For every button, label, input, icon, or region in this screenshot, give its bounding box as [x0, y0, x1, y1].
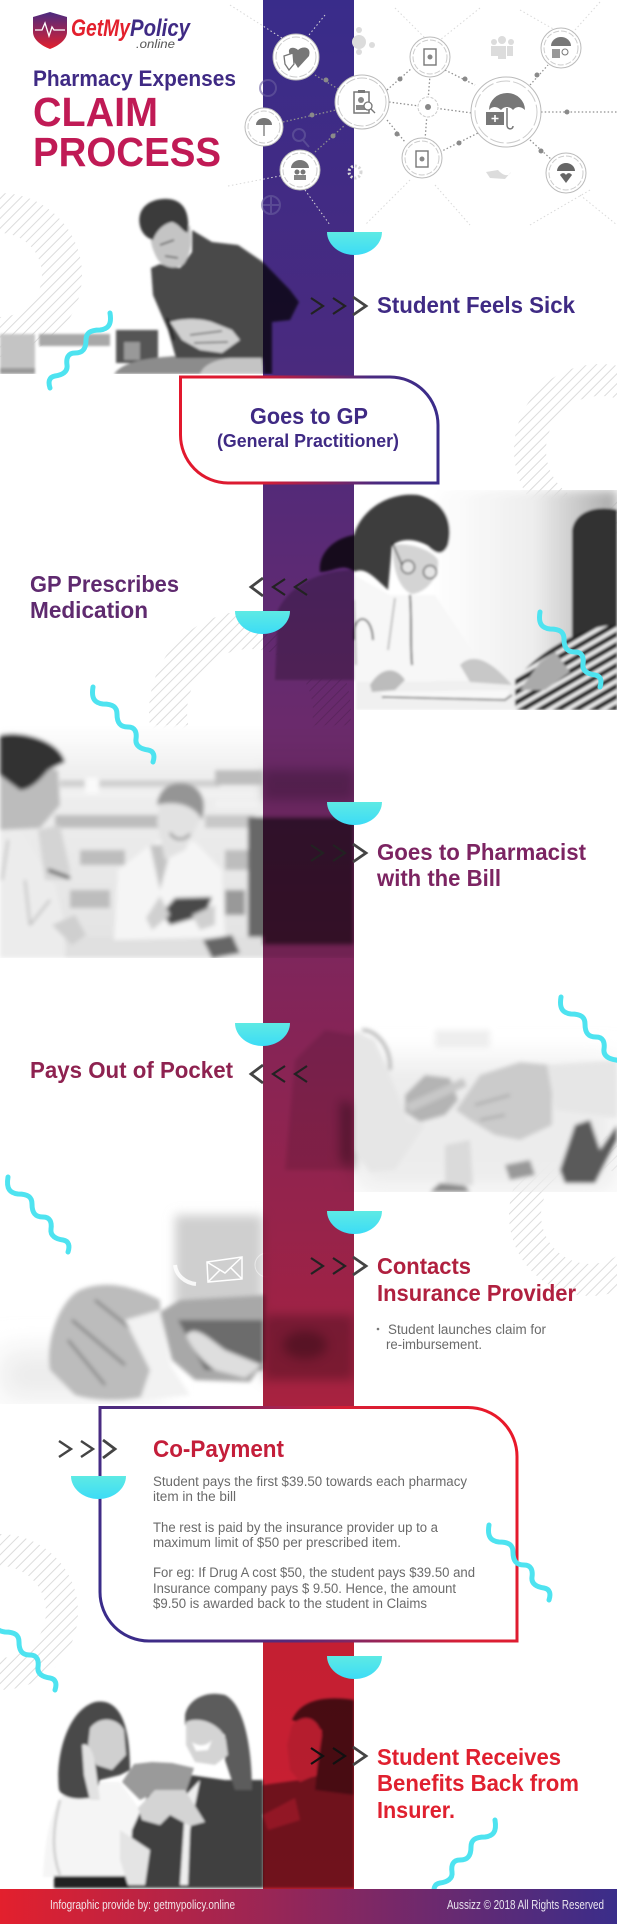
node: heart shield — [273, 34, 319, 80]
step: student receives benefits — [311, 1656, 579, 1823]
heading — [377, 1253, 576, 1306]
body text: For eg: If Drug A cost $50, the student pays $39.50 and — [153, 1565, 475, 1580]
network dotted connectors — [283, 65, 617, 160]
heading: Contacts — [377, 1253, 471, 1279]
body text — [153, 1474, 475, 1611]
heading — [377, 1744, 579, 1823]
decorative striped rings — [0, 213, 617, 1674]
heading: Student Receives — [377, 1744, 561, 1770]
half circle marker — [327, 1656, 382, 1679]
heading: Insurer. — [377, 1797, 455, 1823]
central vertical band — [263, 0, 354, 1889]
photo: hand holding phone — [0, 1215, 354, 1400]
node: clipboard shield — [410, 37, 450, 77]
body text: Insurance company pays $ 9.50. Hence, the amount — [153, 1581, 456, 1596]
heading: Insurance Provider — [377, 1280, 576, 1306]
node: umbrella insurance card — [541, 28, 581, 68]
bullet text: re-imbursement. — [386, 1337, 482, 1352]
step: pays out of pocket — [30, 1023, 307, 1083]
arrows — [59, 1440, 115, 1458]
heading: GP Prescribes — [30, 571, 179, 597]
heading: Co-Payment — [153, 1436, 284, 1463]
body text: $9.50 is awarded back to the student in Claims — [153, 1596, 427, 1611]
half circle marker — [327, 1211, 382, 1234]
photo: doctor writing prescription — [275, 490, 617, 710]
logo — [33, 12, 191, 51]
heading: Benefits Back from — [377, 1770, 579, 1796]
body text: Student pays the first $39.50 towards each pharmacy — [153, 1474, 467, 1489]
arrows — [311, 844, 366, 862]
body text: The rest is paid by the insurance provider up to a — [153, 1520, 438, 1535]
icon: shield with heartbeat — [33, 12, 67, 49]
logo: .online — [136, 39, 175, 51]
panel: co-payment — [59, 1408, 517, 1641]
heading — [30, 571, 179, 623]
node: umbrella heart — [546, 153, 586, 193]
node: umbrella family — [280, 150, 320, 190]
half circle marker — [235, 611, 290, 634]
half circle marker — [327, 802, 382, 825]
arrows — [311, 297, 366, 315]
node: main umbrella with medical kit — [471, 77, 541, 147]
callout: goes to GP — [180, 377, 438, 483]
small center target node — [418, 97, 438, 117]
node: clipboard search — [335, 75, 389, 129]
network diagram — [228, 2, 617, 225]
bullet text — [377, 1322, 546, 1352]
heading: Medication — [30, 597, 148, 623]
body text: item in the bill — [153, 1489, 236, 1504]
half circle marker — [327, 232, 382, 255]
heading: with the Bill — [376, 865, 501, 891]
title: CLAIM — [33, 89, 158, 135]
title: Pharmacy Expenses — [33, 66, 236, 91]
faded background icons — [352, 27, 514, 179]
logo wordmark: GetMy — [71, 15, 131, 42]
heading: Goes to Pharmacist — [377, 839, 586, 865]
panel frame — [100, 1408, 517, 1641]
half circle marker — [71, 1476, 126, 1499]
callout: goes to GP: Goes to GP — [250, 403, 368, 429]
step: contacts insurance provider — [311, 1211, 576, 1352]
arrows — [311, 1257, 366, 1275]
faint network lines — [228, 2, 617, 225]
logo: Policy — [130, 15, 191, 42]
heading — [376, 839, 586, 891]
heading: Student Feels Sick — [377, 292, 575, 318]
node: clipboard heart — [402, 138, 442, 178]
arrows — [251, 578, 307, 596]
photo: sick student — [0, 199, 299, 374]
title — [33, 66, 236, 175]
step: student feels sick — [311, 232, 575, 318]
body text: maximum limit of $50 per prescribed item. — [153, 1535, 401, 1550]
icons: phone, envelope and at sign — [175, 1253, 279, 1284]
node: umbrella coins — [245, 108, 283, 146]
title: PROCESS — [33, 129, 221, 175]
half circle marker — [235, 1023, 290, 1046]
photo: women with money — [43, 1694, 354, 1888]
footer: Infographic provide by: getmypolicy.online — [50, 1898, 235, 1912]
bullet text: Student launches claim for — [388, 1322, 546, 1337]
heading: Pays Out of Pocket — [30, 1057, 233, 1083]
photo: pharmacist counter — [0, 725, 354, 958]
photo: paying by card — [285, 1030, 617, 1192]
arrows — [311, 1747, 366, 1765]
step: goes to pharmacist — [311, 802, 586, 891]
step: GP prescribes medication — [30, 571, 307, 634]
callout: goes to GP: (General Practitioner) — [217, 431, 399, 451]
arrows — [251, 1065, 307, 1083]
footer — [0, 1889, 617, 1924]
